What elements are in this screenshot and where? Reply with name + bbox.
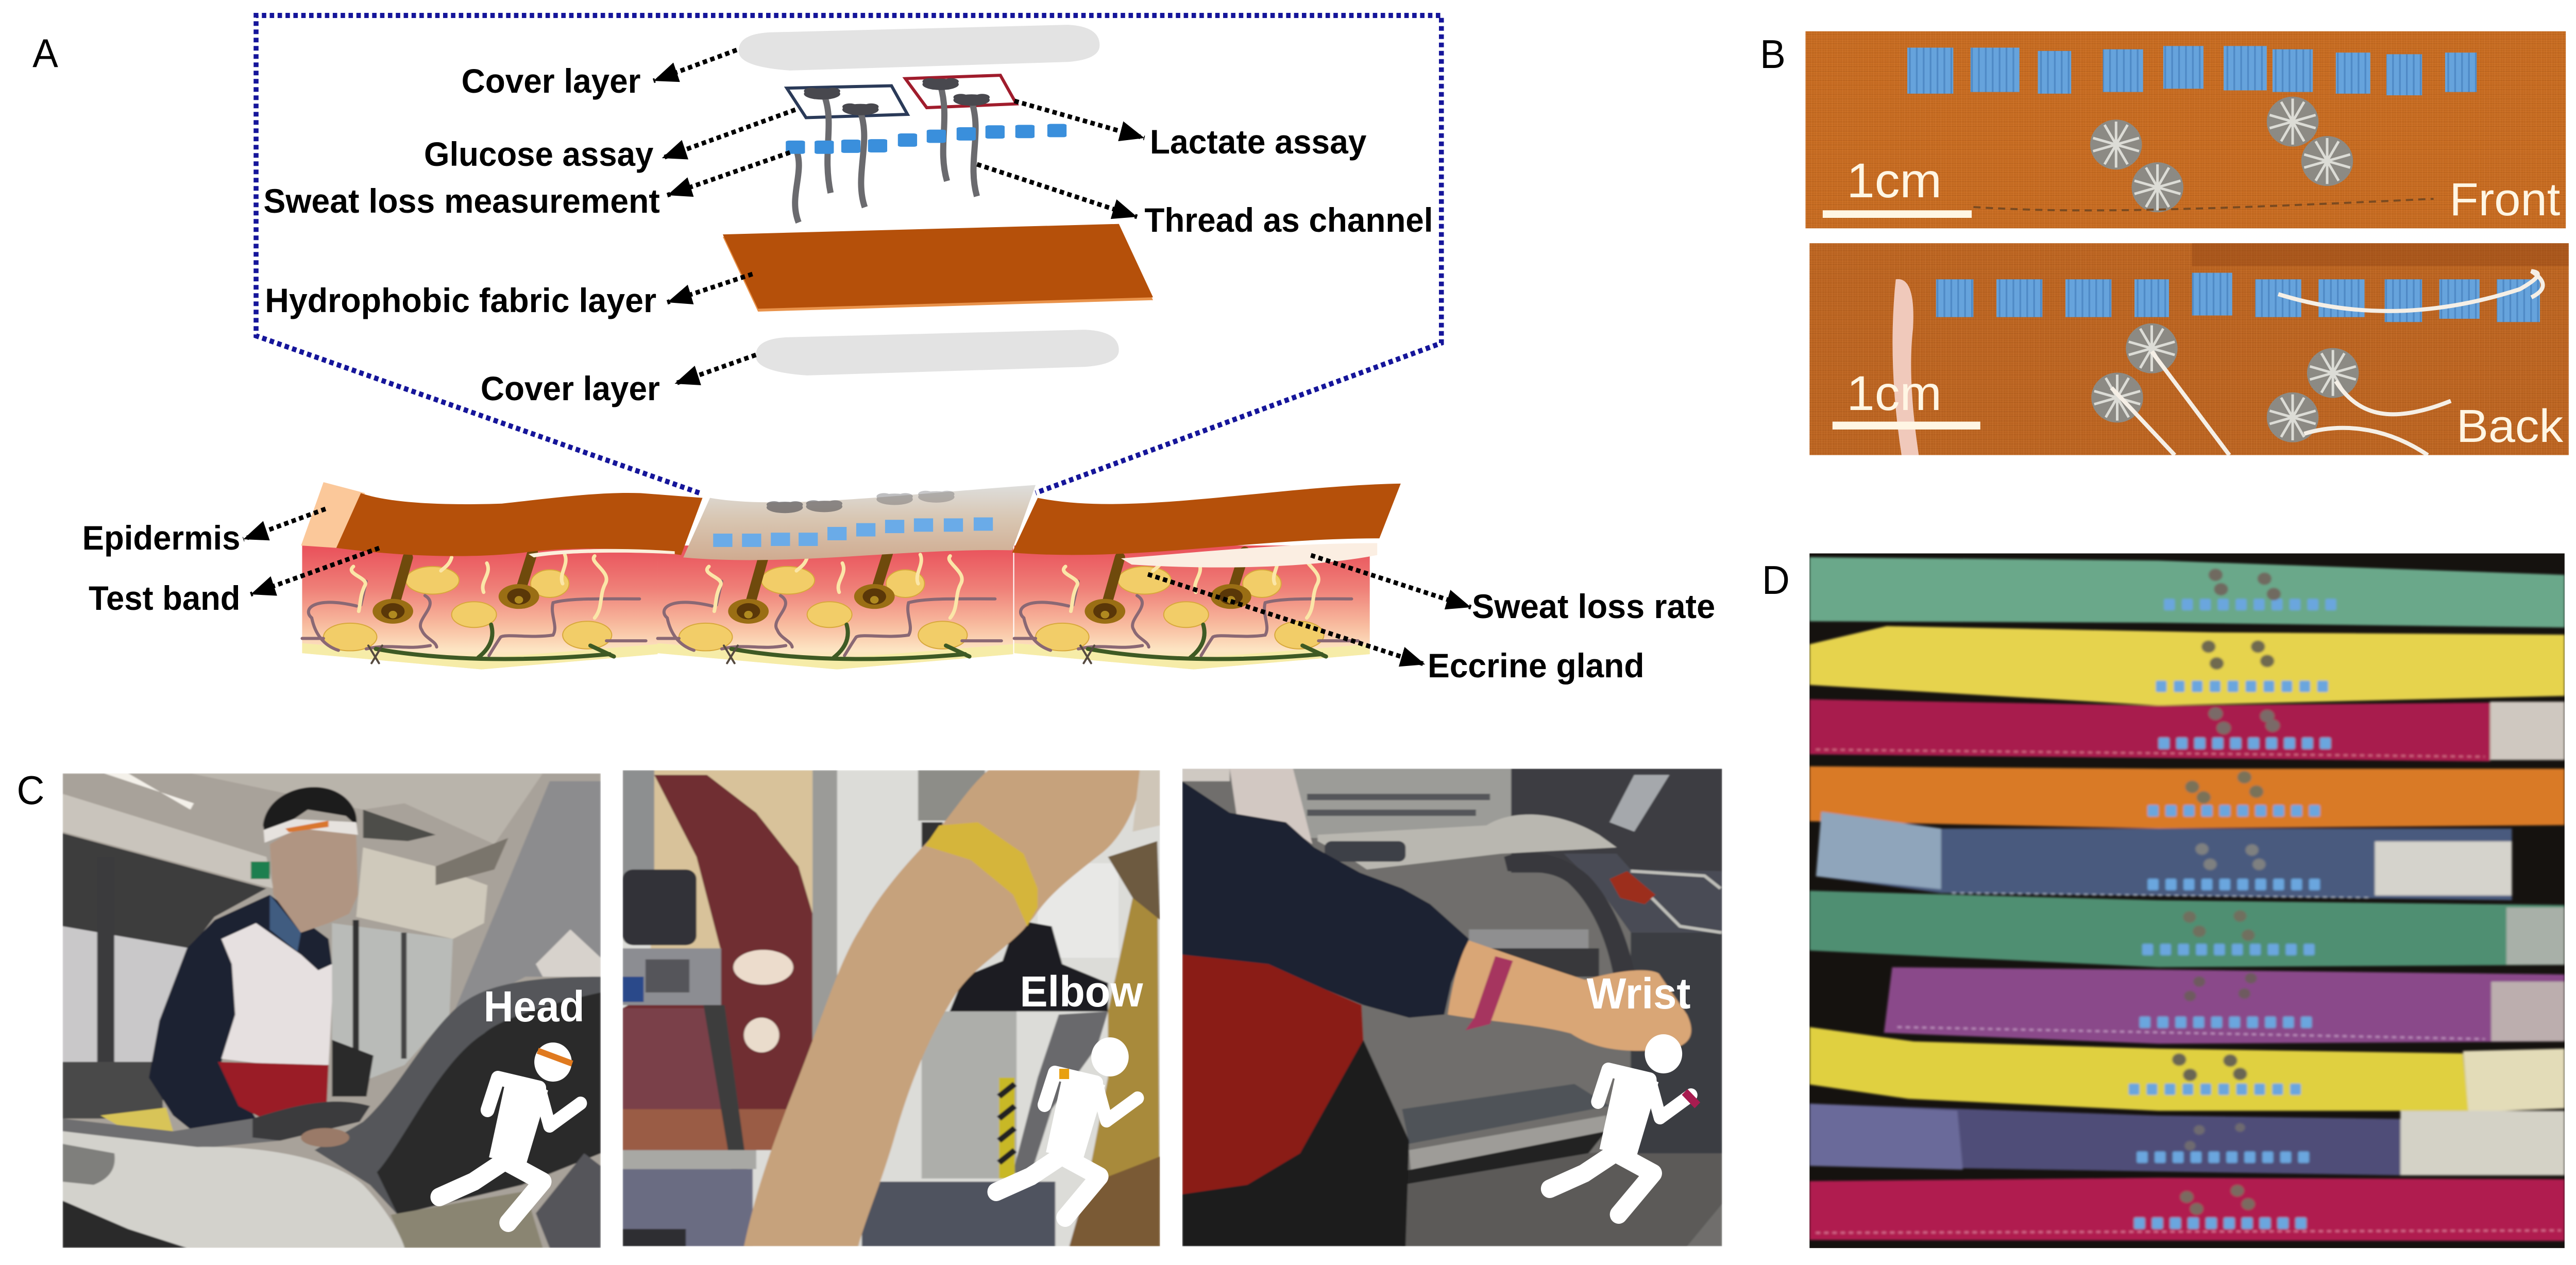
sweat wet patch xyxy=(1121,543,1377,568)
poster xyxy=(651,770,812,1150)
icon: runner wrist xyxy=(1550,1034,1698,1215)
panel: D colored band photo xyxy=(1762,553,2565,1248)
leader arrows xyxy=(243,50,1471,664)
label: sweat loss measurement: Sweat loss measurement xyxy=(263,182,660,220)
exploded layers xyxy=(723,25,1153,375)
forearm xyxy=(1448,941,1691,1051)
cream highlight under band xyxy=(529,549,675,557)
dark top edge xyxy=(2192,243,2569,266)
transparent sensing zone xyxy=(683,485,1036,560)
arm xyxy=(744,770,1140,1246)
assay stitches xyxy=(2090,97,2353,212)
scale text back: 1cm xyxy=(1846,366,1942,420)
bottom cover layer xyxy=(756,330,1119,375)
fabric xyxy=(1805,31,2566,228)
black backdrop xyxy=(1809,553,2565,1248)
glucose assay frame xyxy=(787,86,907,117)
yellow item xyxy=(100,1107,173,1131)
test band right xyxy=(1012,484,1401,555)
head band xyxy=(264,819,358,843)
assay spots xyxy=(804,78,990,115)
epidermis xyxy=(301,482,365,548)
label: eccrine gland: Eccrine gland xyxy=(1428,647,1645,685)
console xyxy=(62,1131,404,1248)
red shirt xyxy=(1182,954,1363,1194)
back caption: Back xyxy=(2456,400,2564,452)
treadmill left xyxy=(622,770,654,898)
photo: ten colored bands xyxy=(1809,553,2565,1248)
scale text front: 1cm xyxy=(1846,153,1942,208)
icon: runner head xyxy=(439,1042,581,1223)
caption: wrist: Wrist xyxy=(1587,970,1690,1018)
icon: runner elbow xyxy=(996,1037,1138,1218)
machine dark panel xyxy=(315,977,601,1215)
test band left xyxy=(336,493,703,556)
band 6 green xyxy=(1809,891,2565,967)
label: test band: Test band xyxy=(89,579,240,617)
dark window xyxy=(62,833,266,948)
band 5 navy xyxy=(1816,812,2512,900)
pale column xyxy=(1230,768,1312,844)
hydrophobic fabric layer xyxy=(723,224,1153,312)
handle xyxy=(1504,852,1634,973)
band 10 crimson xyxy=(1809,1178,2565,1241)
label: hydrophobic fabric layer: Hydrophobic fabric layer xyxy=(265,282,656,319)
band 4 orange xyxy=(1809,766,2565,828)
label: glucose assay: Glucose assay xyxy=(424,135,653,173)
magenta band xyxy=(1465,956,1513,1030)
pale adhesive streak xyxy=(1892,279,1919,455)
blue stitch row xyxy=(1907,46,2477,95)
band 1 green xyxy=(1809,557,2565,627)
panel label A: A xyxy=(32,31,58,76)
assay stitches xyxy=(2091,323,2359,442)
blue stitch row xyxy=(1936,273,2540,322)
panel: A device schematic xyxy=(32,15,1715,685)
photo: front of band xyxy=(1805,31,2566,228)
exit sign xyxy=(251,862,270,879)
plaid shirt xyxy=(1070,841,1160,1246)
photo: wrist xyxy=(1182,768,1722,1246)
label: sweat loss rate: Sweat loss rate xyxy=(1472,588,1715,625)
panel label B: B xyxy=(1760,32,1786,77)
machine column xyxy=(453,781,601,1015)
hazard strip xyxy=(999,1078,1015,1178)
threads as channel xyxy=(795,86,977,223)
band 9 slate purple xyxy=(1809,1104,2565,1175)
stitch line xyxy=(1973,199,2434,210)
top cover layer xyxy=(739,25,1099,71)
machine background xyxy=(1182,768,1722,1246)
label: lactate assay: Lactate assay xyxy=(1150,123,1367,161)
panel: B fabric photos xyxy=(1760,31,2569,455)
caption: head: Head xyxy=(484,983,585,1031)
black trousers xyxy=(1182,1040,1409,1246)
photo: head xyxy=(62,773,601,1248)
right console xyxy=(1631,933,1722,1153)
scale bar xyxy=(1823,210,1972,218)
caption: elbow: Elbow xyxy=(1020,968,1144,1016)
panel label C: C xyxy=(16,768,44,813)
skin tile middle xyxy=(658,545,1013,670)
handle xyxy=(62,1102,370,1149)
skin tile left xyxy=(302,545,658,670)
poster frame xyxy=(812,770,837,1180)
sweat loss measurement stitches xyxy=(786,124,1066,154)
man torso xyxy=(149,895,332,1138)
band 8 yellow xyxy=(1809,1027,2565,1112)
step and bars xyxy=(1402,1084,1609,1144)
fabric xyxy=(1809,243,2569,455)
yellow band xyxy=(925,822,1038,926)
wall background xyxy=(622,770,1160,1246)
band 7 purple xyxy=(1884,967,2565,1044)
dotted zoom outline xyxy=(256,15,1442,493)
band 2 yellow xyxy=(1809,626,2565,706)
label: epidermis: Epidermis xyxy=(82,519,240,557)
label: cover layer bottom: Cover layer xyxy=(481,370,660,407)
gym background xyxy=(62,773,601,1248)
man head xyxy=(270,825,358,933)
jacket sleeve xyxy=(1182,781,1469,1018)
skin cross-section with band xyxy=(301,482,1401,670)
panel: C on-body photos xyxy=(16,768,1722,1248)
machine middle xyxy=(922,1012,1020,1178)
front caption: Front xyxy=(2449,173,2560,225)
white threads xyxy=(2111,271,2543,455)
photo: elbow xyxy=(622,770,1160,1246)
floor and leg xyxy=(391,1191,543,1248)
label: cover layer top: Cover layer xyxy=(462,62,641,100)
scale bar xyxy=(1833,422,1980,430)
skin tile right xyxy=(1014,545,1370,670)
lactate assay frame xyxy=(905,75,1016,108)
band 3 crimson xyxy=(1809,699,2565,761)
label: thread as channel: Thread as channel xyxy=(1144,201,1433,239)
photo: back of band xyxy=(1809,243,2569,455)
panel label D: D xyxy=(1762,558,1790,603)
